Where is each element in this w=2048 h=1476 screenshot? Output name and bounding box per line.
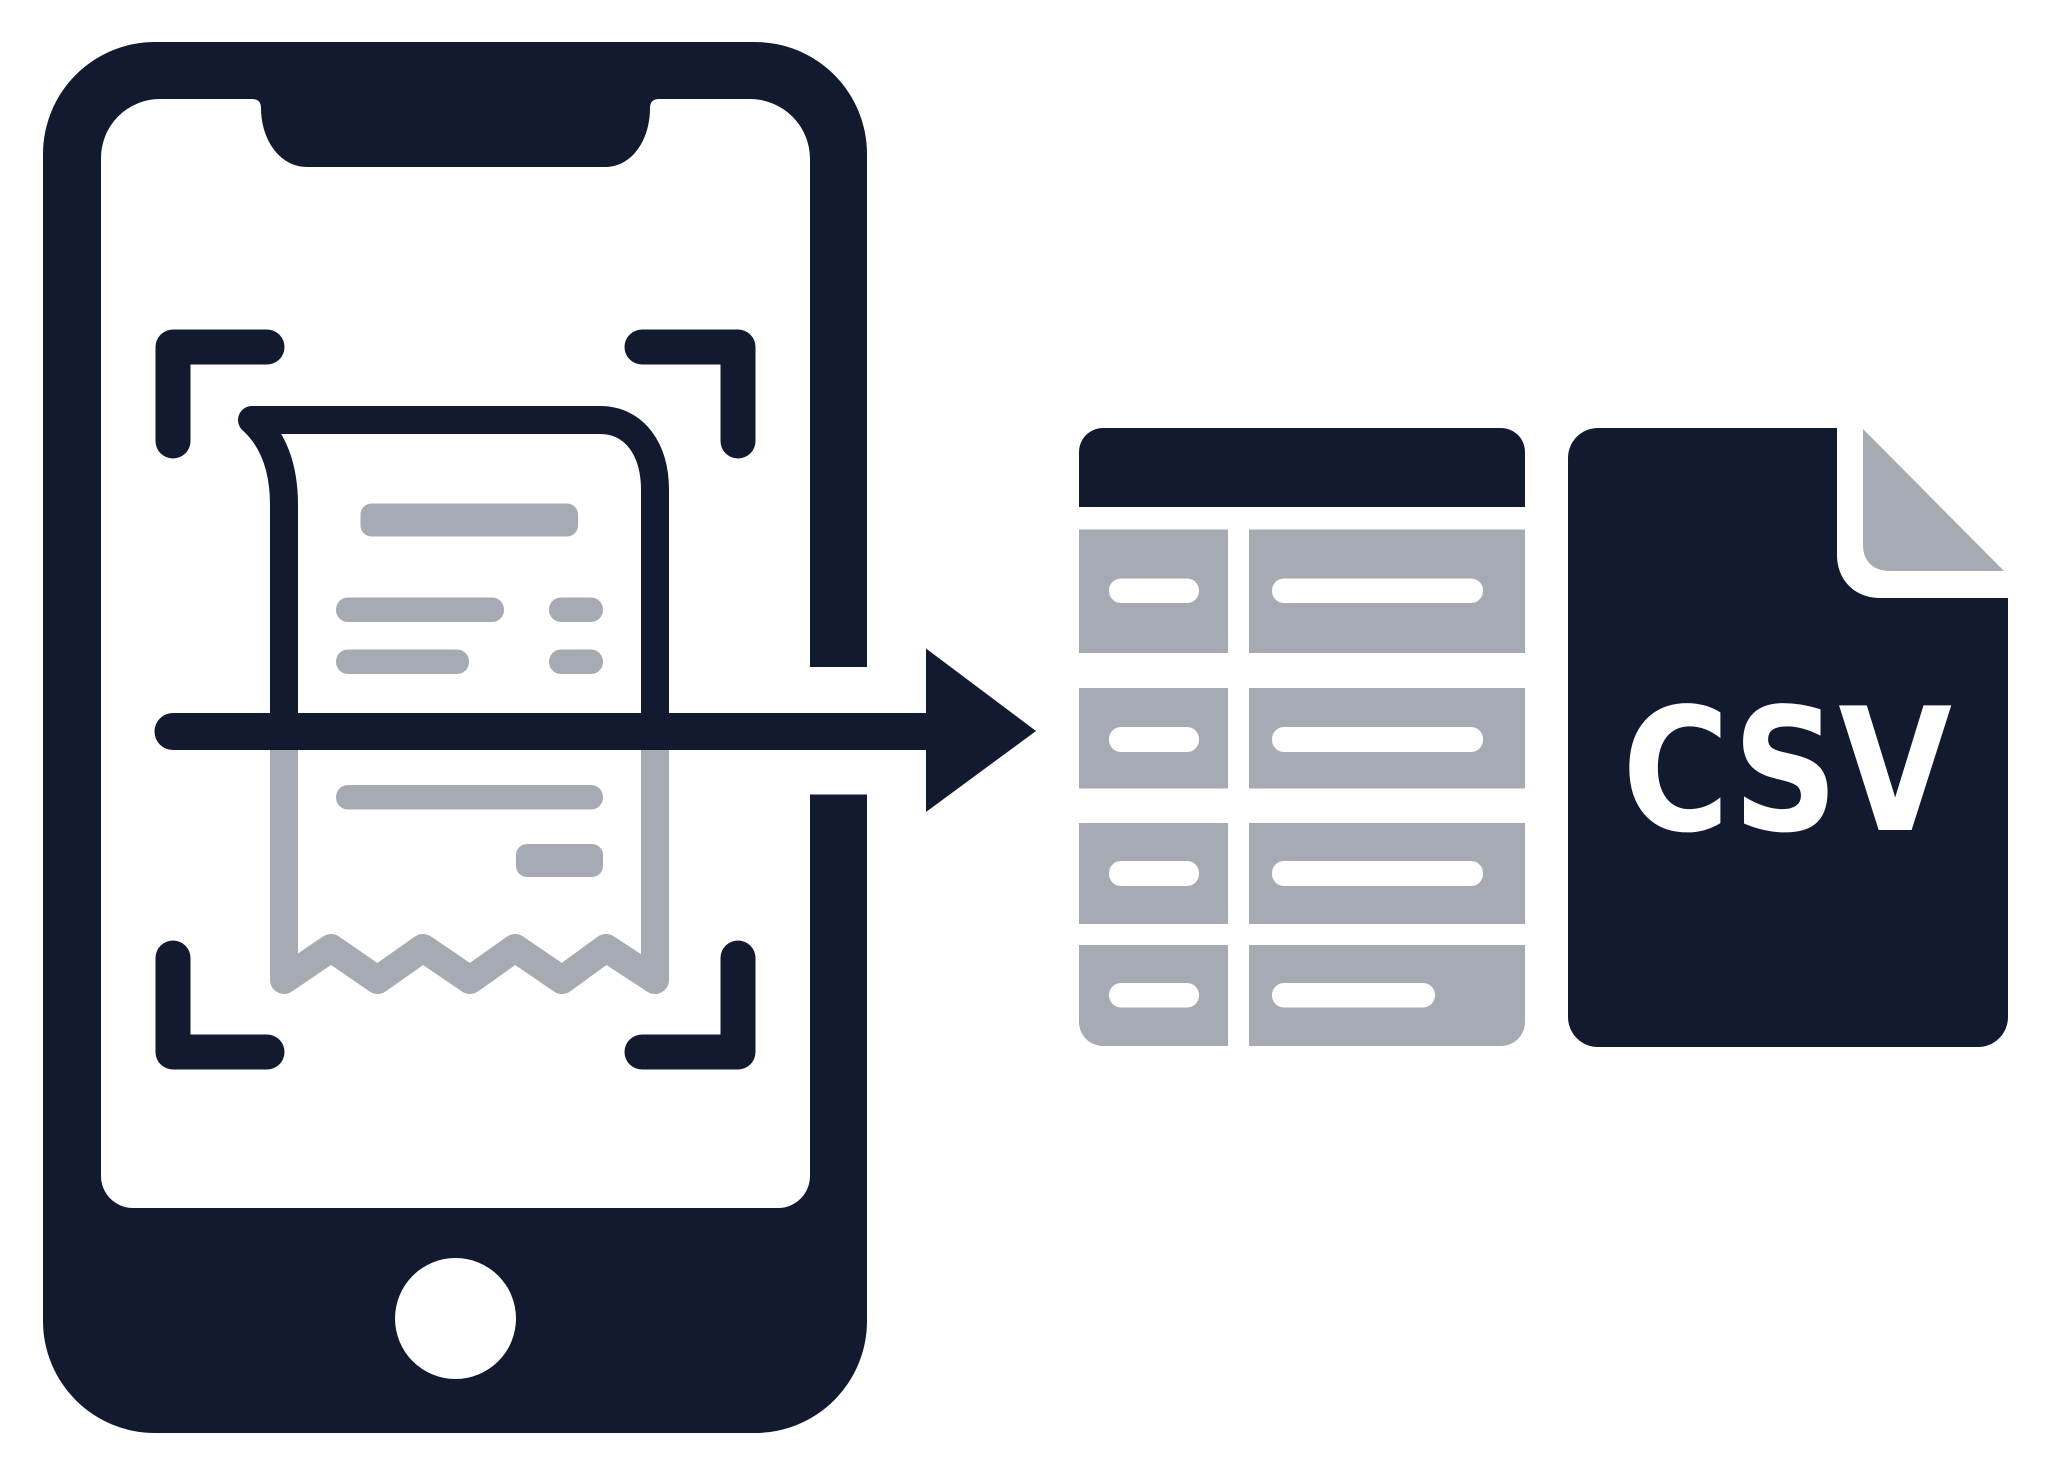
icon: receipt scanned upper part bbox=[252, 420, 655, 730]
file corner fold bbox=[1863, 429, 2004, 571]
file body bbox=[1568, 428, 2008, 1047]
arrow: scan line to table bbox=[154, 648, 1036, 812]
table: extracted rows bbox=[1079, 428, 1525, 1046]
icon: smartphone bbox=[43, 42, 871, 1433]
icon: CSV file bbox=[1568, 428, 2008, 1047]
file label: CSV bbox=[1622, 672, 1952, 871]
table row 3 bbox=[1079, 823, 1525, 924]
table row 1 bbox=[1079, 530, 1525, 653]
table row 4 bbox=[1079, 945, 1525, 1046]
table header bbox=[1079, 428, 1525, 507]
icon: receipt unscanned lower part bbox=[284, 745, 655, 980]
icon: scan frame corners bbox=[173, 347, 738, 1052]
table row 2 bbox=[1079, 688, 1525, 788]
